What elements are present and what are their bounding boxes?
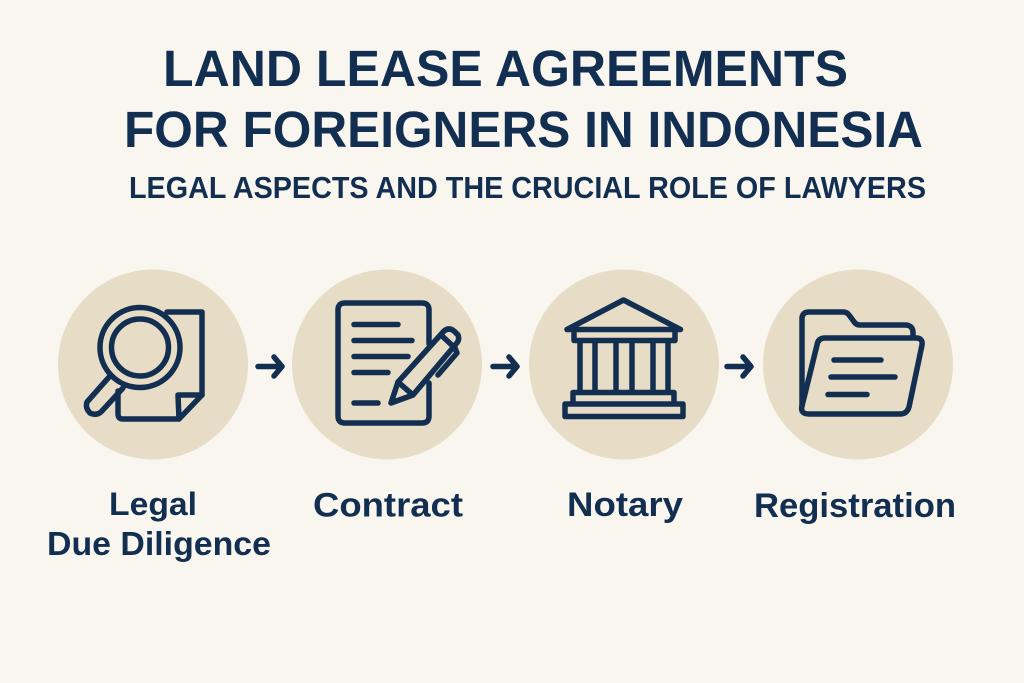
icon: magnifier on document [86,308,202,419]
icon: document and pen [338,303,459,423]
circle 2 [292,270,482,460]
step 3: notary [529,270,719,524]
arrow 3 [727,357,751,376]
step 4: registration [754,270,956,525]
title: FOR FOREIGNERS IN INDONESIA [124,101,923,158]
label 4: Registration [754,487,956,525]
label 2: Contract [313,486,463,524]
title [124,40,923,158]
label 1: Due Diligence [47,525,271,562]
circle 3 [529,270,719,460]
arrow 2 [493,357,517,376]
circle 1 [58,270,248,460]
label 1: Legal [109,486,197,522]
label 1 [47,486,271,562]
icon: folder [802,312,922,414]
icon: courthouse [565,300,683,416]
step 2: contract [292,270,482,524]
subtitle: LEGAL ASPECTS AND THE CRUCIAL ROLE OF LAWYERS [129,171,926,205]
title: LAND LEASE AGREEMENTS [163,40,848,97]
label 3: Notary [567,486,683,524]
step 1: legal due diligence [47,270,271,562]
arrow 1 [258,357,282,376]
circle 4 [763,270,953,460]
